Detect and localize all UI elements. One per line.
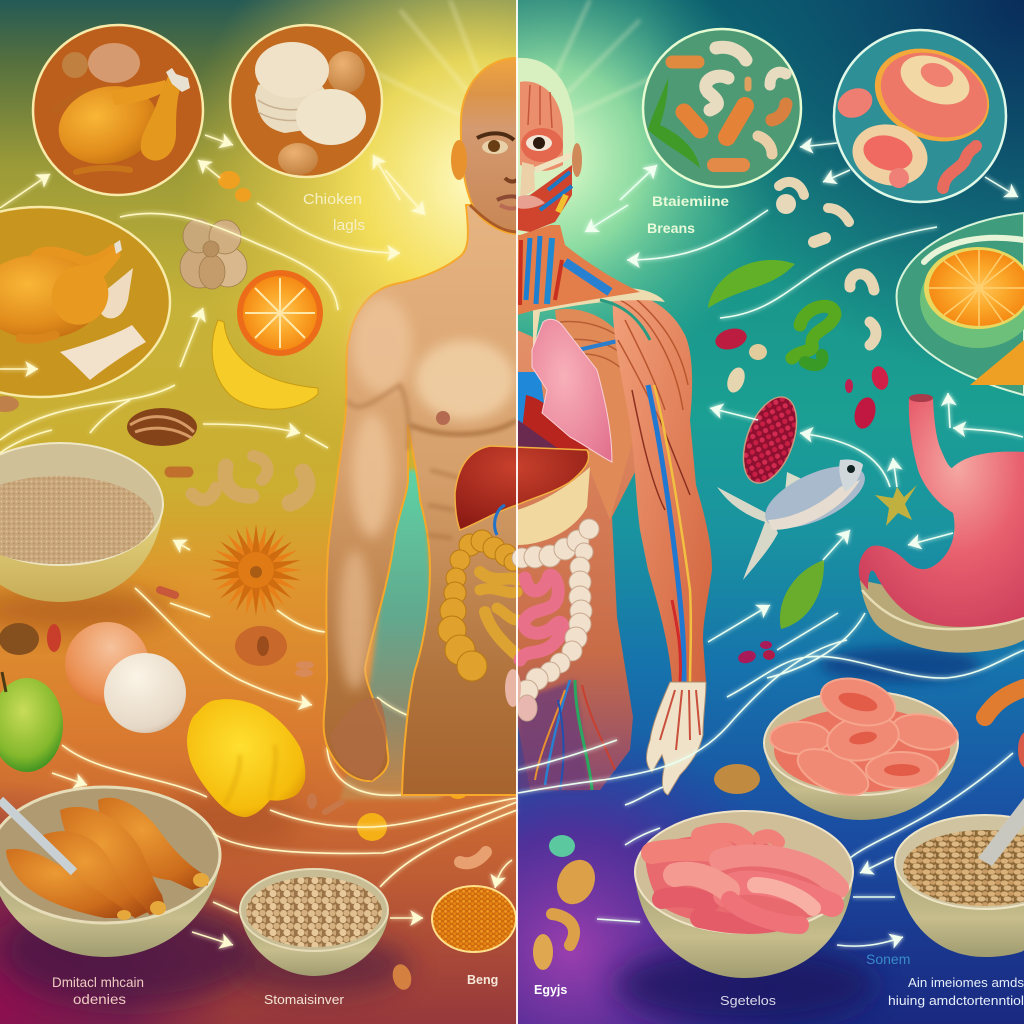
icon: fish xyxy=(717,453,874,580)
organ: small yellow intestine xyxy=(480,572,517,655)
head xyxy=(461,58,517,234)
label: top right beans: Breans xyxy=(647,220,695,236)
icon: green apple xyxy=(0,672,63,772)
icon: small nuts and seeds xyxy=(218,171,486,992)
icon: garlic xyxy=(180,219,247,289)
arrows: right side flow lines xyxy=(518,143,1024,946)
panel: bowl of lentils xyxy=(240,869,389,976)
panel: beans circle xyxy=(643,29,801,187)
sunburst behind head xyxy=(330,0,690,130)
label: eggs: Egyjs xyxy=(534,983,567,997)
organ: stomach xyxy=(517,467,590,545)
icon: almond xyxy=(714,764,760,794)
icon: scattered cashews xyxy=(776,182,876,345)
label: bottom left: odenies xyxy=(73,991,126,1007)
panel: citrus roundel xyxy=(897,213,1024,395)
icon: yellow pepper xyxy=(187,699,305,817)
label: sonem: Sonem xyxy=(866,951,910,967)
background: cool right half xyxy=(517,0,1024,1024)
label: bottom right: Ain imeiomes amds xyxy=(908,975,1024,990)
panel: bowl of grain xyxy=(0,443,163,602)
label: bottom center right: Sgetelos xyxy=(720,993,777,1008)
panel: chicken circle xyxy=(33,25,203,195)
background: teal gap between left arm and torso xyxy=(340,470,440,800)
label: top left chicken xyxy=(303,191,365,234)
panel: bread circle xyxy=(230,25,382,177)
lower torso dark region with fibres base xyxy=(518,680,590,790)
organ: pale colon xyxy=(512,519,599,721)
icon: orange spice disc xyxy=(432,886,516,952)
label: bottom left: Dmitacl mhcain xyxy=(52,974,144,990)
divider line xyxy=(516,0,518,1024)
label: beng: Beng xyxy=(467,973,498,987)
label: bottom left xyxy=(52,974,144,1007)
icon: cashews xyxy=(170,456,307,503)
label: bottom right xyxy=(888,975,1024,1008)
panel: bowl of pink meat xyxy=(764,671,960,820)
organ: large yellow colon xyxy=(438,530,522,681)
label: top right beans xyxy=(647,193,729,236)
chest shading xyxy=(415,340,515,420)
muscular arm xyxy=(613,293,712,682)
body: anatomical right half xyxy=(517,58,712,795)
icon: starfish xyxy=(875,485,917,526)
panel: sliced meat circle xyxy=(833,30,1006,202)
panel: bowl of chicken legs xyxy=(0,787,220,957)
organ: pink small intestine xyxy=(520,575,563,660)
label: top right beans: Btaiemiine xyxy=(652,193,729,209)
deltoid and bicep shading xyxy=(352,297,412,393)
icon: dried fruit xyxy=(0,590,314,677)
label: bottom right: hiuing amdctortenntiol xyxy=(888,993,1024,1008)
arm vessels bundle xyxy=(648,385,684,682)
label: stomach: Stomaisinver xyxy=(264,992,345,1007)
organ: large stomach in bowl xyxy=(859,394,1024,653)
panel: large chicken roundel xyxy=(0,207,170,412)
icon: banana xyxy=(212,320,318,409)
neck muscles xyxy=(517,225,640,315)
organ: liver xyxy=(455,446,589,530)
clavicle xyxy=(533,288,665,346)
label: top left chicken: lagls xyxy=(333,217,365,234)
blue vessels chest xyxy=(518,372,544,424)
lower torso muscle xyxy=(517,330,636,790)
icon: green knot vegetable xyxy=(792,306,835,365)
body: skin left half xyxy=(324,58,517,795)
thoracic fibres xyxy=(555,309,633,520)
icon: pecan xyxy=(127,408,197,446)
icon: green leaf lower xyxy=(780,560,824,629)
panel: bowl of seeds with spoon xyxy=(895,798,1024,957)
small vessel ring xyxy=(495,505,505,535)
icon: orange flower xyxy=(201,516,311,624)
organ: pale bulge and nerve fibres xyxy=(505,669,615,790)
neck, shoulder, arm and torso xyxy=(324,205,517,795)
label: top left chicken: Chioken xyxy=(303,191,362,208)
icon: eggs xyxy=(65,622,186,733)
head with exposed muscle xyxy=(517,58,575,235)
roast bird xyxy=(50,75,166,175)
arrows: left side flow lines xyxy=(0,135,517,945)
panel: large bowl of pink meat xyxy=(635,811,853,978)
hand xyxy=(646,682,706,795)
icon: green leaf xyxy=(708,260,795,308)
icon: sausages right edge xyxy=(985,688,1024,768)
icon: peanuts and gem xyxy=(533,835,602,970)
background: warm left half xyxy=(0,0,518,1024)
icon: scattered beans xyxy=(713,325,891,665)
organ: lung xyxy=(532,319,612,462)
icon: orange slice xyxy=(237,270,323,356)
icon: pomegranate seeds pod xyxy=(733,390,807,490)
